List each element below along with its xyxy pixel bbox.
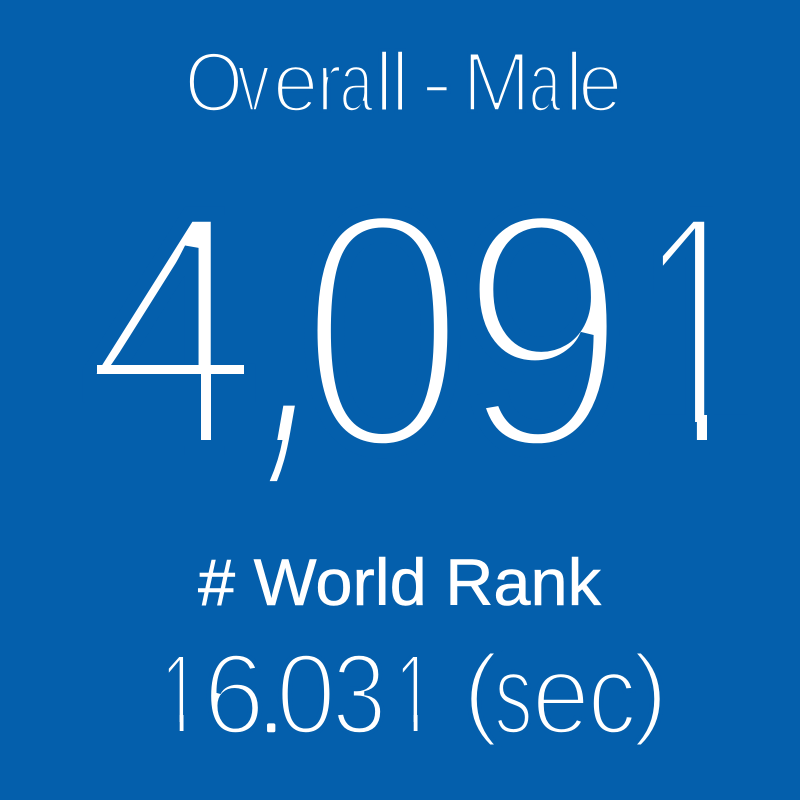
big number: world rank value: 0: [299, 141, 466, 520]
time value: s: [494, 630, 533, 758]
big number: world rank value: 1: [638, 141, 754, 520]
label: world rank: # World Rank: [198, 545, 602, 619]
title: M: [462, 35, 531, 129]
title: a: [529, 36, 562, 129]
time value: 3: [332, 631, 386, 758]
time value: [160, 630, 669, 759]
title: [185, 35, 622, 130]
time value: 1: [161, 631, 199, 759]
big number: world rank value: ,: [254, 150, 351, 509]
time value: 1: [395, 631, 433, 759]
time value: .: [264, 685, 278, 741]
title: e: [578, 36, 622, 129]
time value: c: [588, 631, 636, 758]
big number: world rank value: 4: [82, 142, 257, 520]
title: O: [185, 35, 243, 129]
title: r: [316, 35, 342, 130]
time value: e: [532, 631, 590, 758]
time value: 6: [203, 630, 265, 758]
title: a: [340, 35, 373, 129]
title: l: [375, 35, 393, 129]
title: -: [421, 36, 453, 129]
big number: world rank value: 9: [459, 141, 628, 520]
big number: world rank value: [82, 141, 800, 520]
time value: ): [632, 632, 669, 747]
title: l: [391, 35, 409, 129]
time value: 0: [276, 631, 336, 758]
time value: (: [462, 632, 499, 747]
title: v: [237, 35, 270, 129]
title: e: [273, 35, 318, 129]
title: l: [565, 35, 583, 129]
